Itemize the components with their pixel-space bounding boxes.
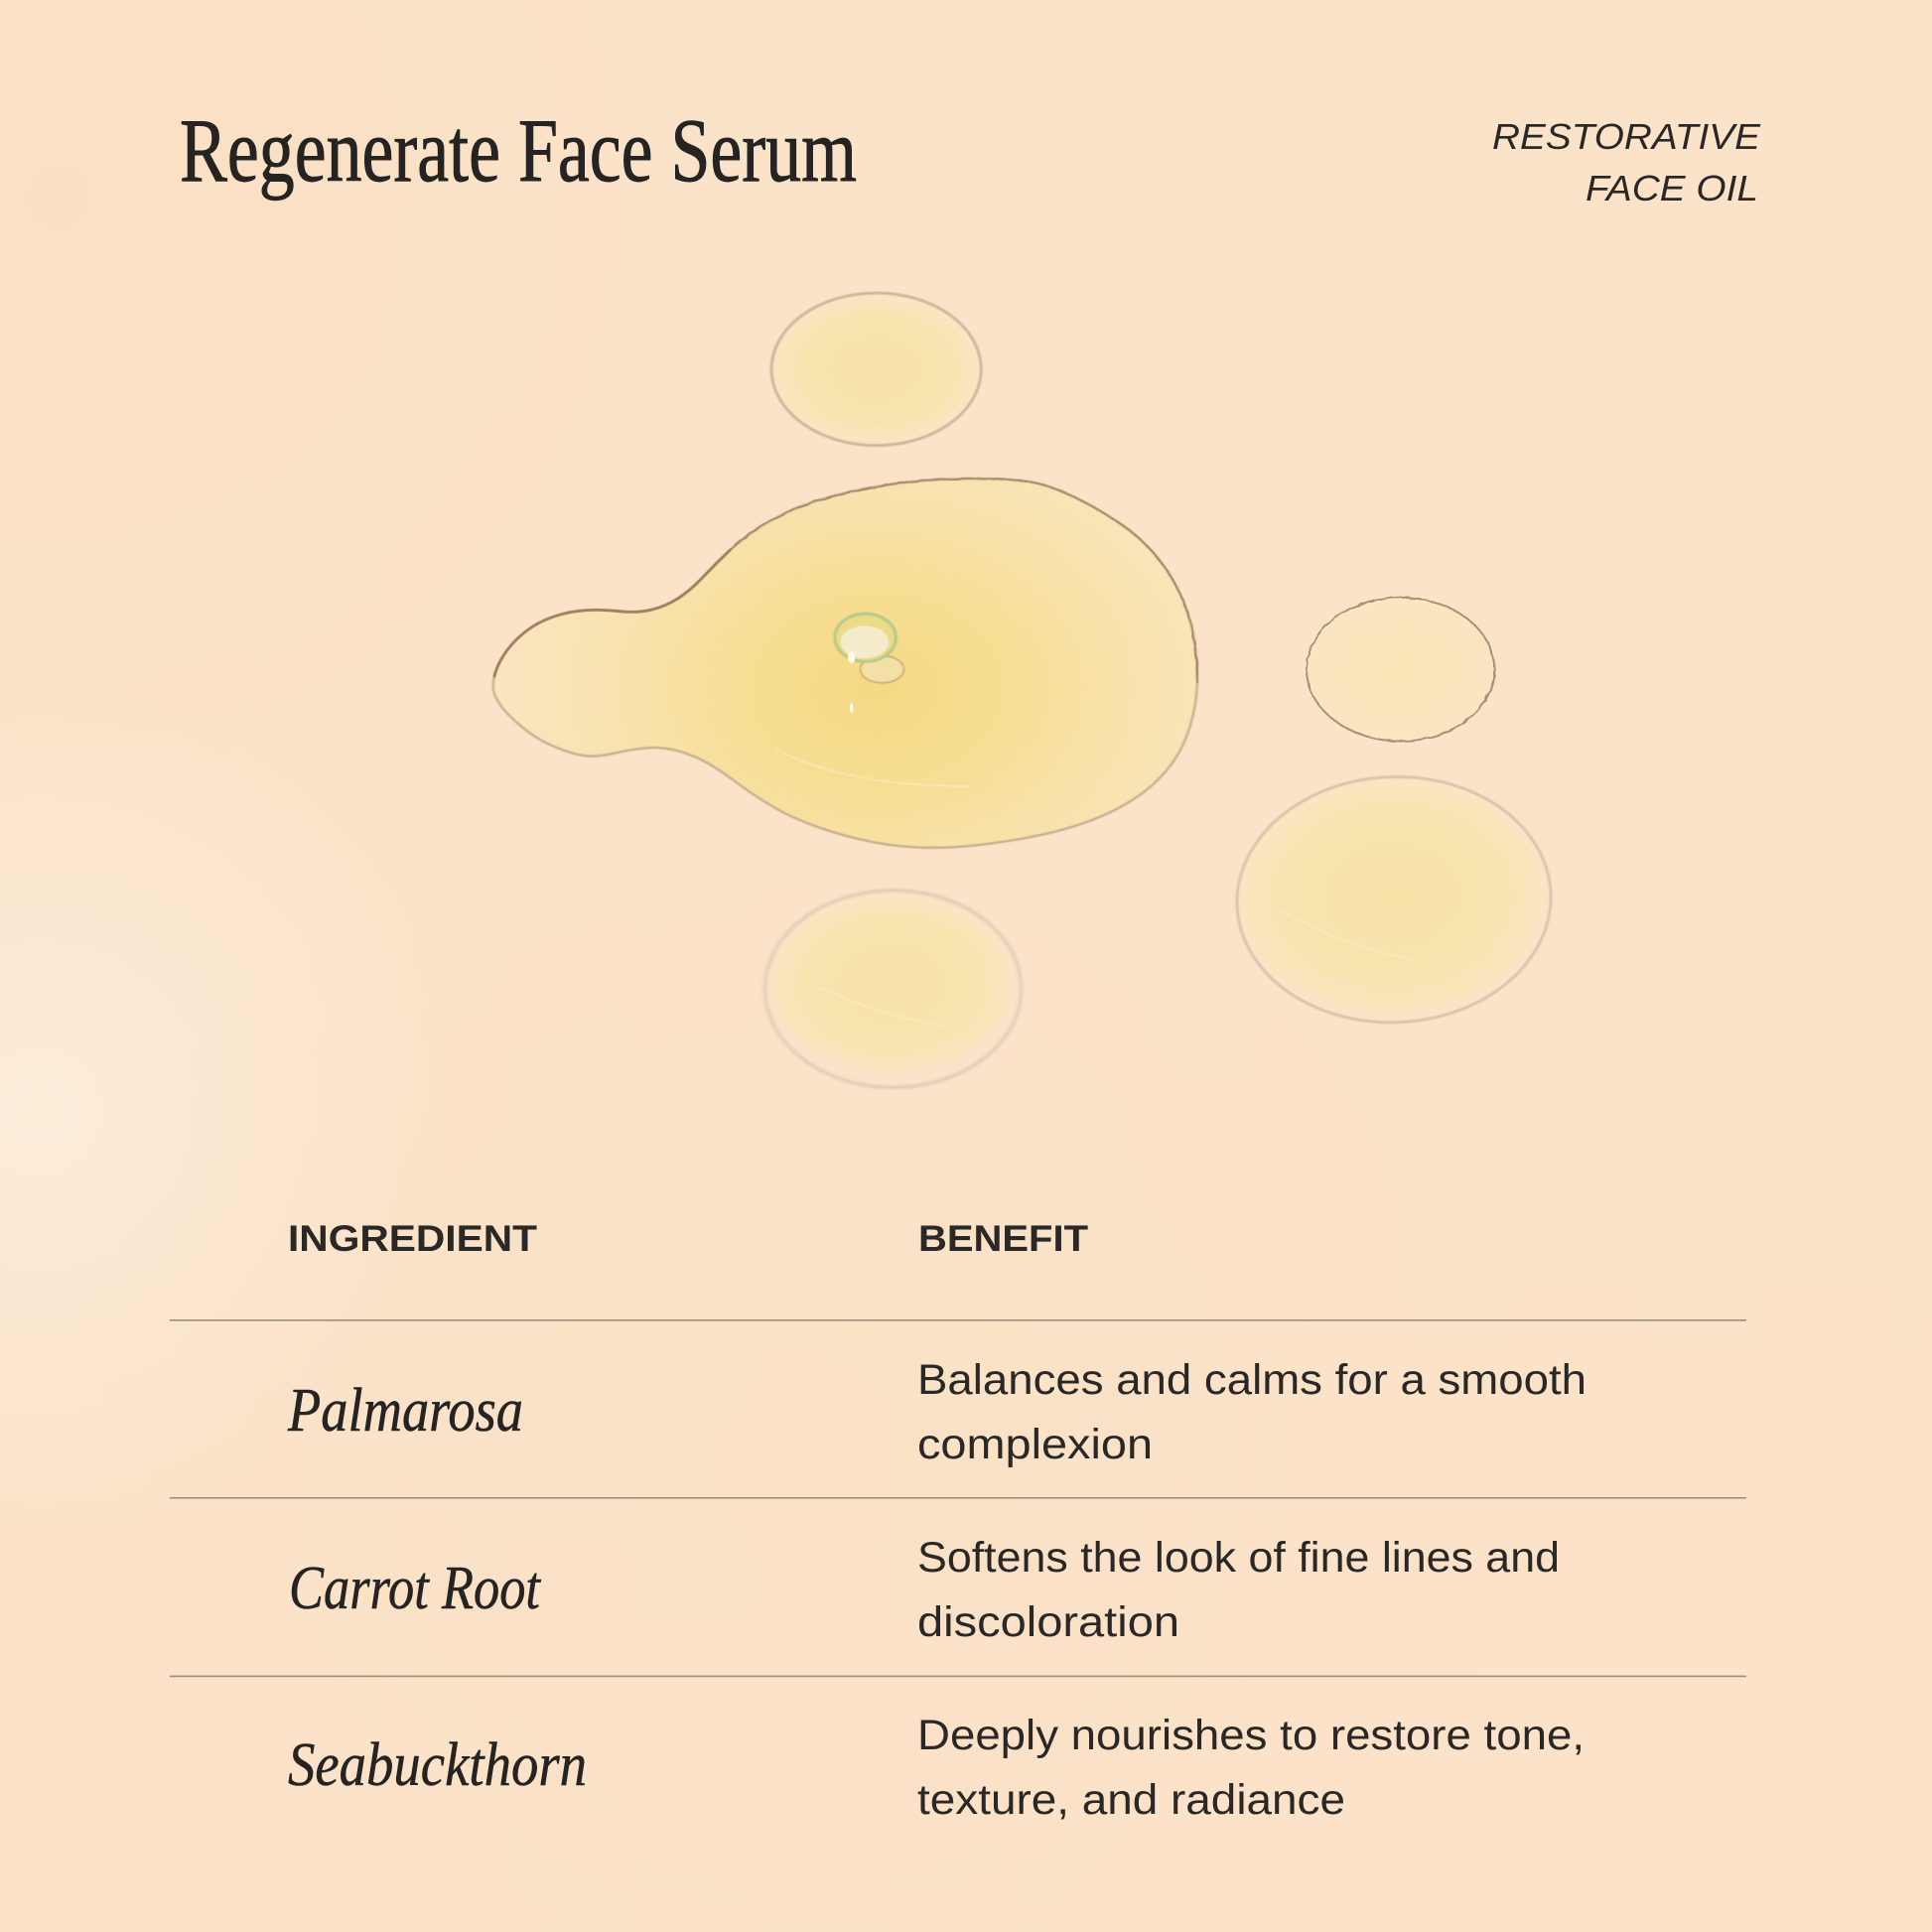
row: palmarosa: complexion: [917, 1421, 1153, 1468]
row: seabuckthorn: [288, 1712, 1585, 1824]
table header: ingredient: INGREDIENT: [288, 1218, 537, 1259]
row: carrot root: [289, 1534, 1560, 1646]
row: carrot root: Carrot Root: [289, 1555, 541, 1622]
row: carrot root: Softens the look of fine lines and: [917, 1534, 1560, 1582]
row: seabuckthorn: Deeply nourishes to restore tone,: [917, 1712, 1585, 1759]
ingredient table: [170, 1218, 1746, 1824]
air bubble cluster: [835, 614, 904, 713]
row: palmarosa: Palmarosa: [287, 1377, 523, 1445]
main pool rim: fine upper right: [731, 479, 1197, 683]
oil droplets illustration: [493, 293, 1582, 1087]
table header: benefit: BENEFIT: [918, 1218, 1088, 1259]
main pool rim: dark upper left: [494, 549, 731, 677]
subtitle: restorative face oil: FACE OIL: [1586, 168, 1758, 208]
droplet: main oil pool: [493, 479, 1197, 848]
droplet: top: [771, 293, 981, 446]
row: seabuckthorn: Seabuckthorn: [288, 1731, 587, 1799]
droplet: bottom: [764, 891, 1022, 1087]
subtitle: restorative face oil: RESTORATIVE: [1492, 116, 1761, 157]
droplet: lower right: [1206, 755, 1582, 1044]
droplet: right small: [1307, 598, 1494, 742]
main pool rim: bottom and soft edge: [493, 479, 1197, 848]
row: palmarosa: Balances and calms for a smooth: [917, 1356, 1587, 1404]
row: carrot root: discoloration: [917, 1598, 1179, 1646]
row: palmarosa: [287, 1356, 1587, 1468]
main pool ripple: [774, 749, 971, 786]
title: Regenerate Face Serum: [180, 100, 857, 201]
subtitle: restorative face oil: [1492, 116, 1761, 208]
row: seabuckthorn: texture, and radiance: [917, 1776, 1345, 1824]
